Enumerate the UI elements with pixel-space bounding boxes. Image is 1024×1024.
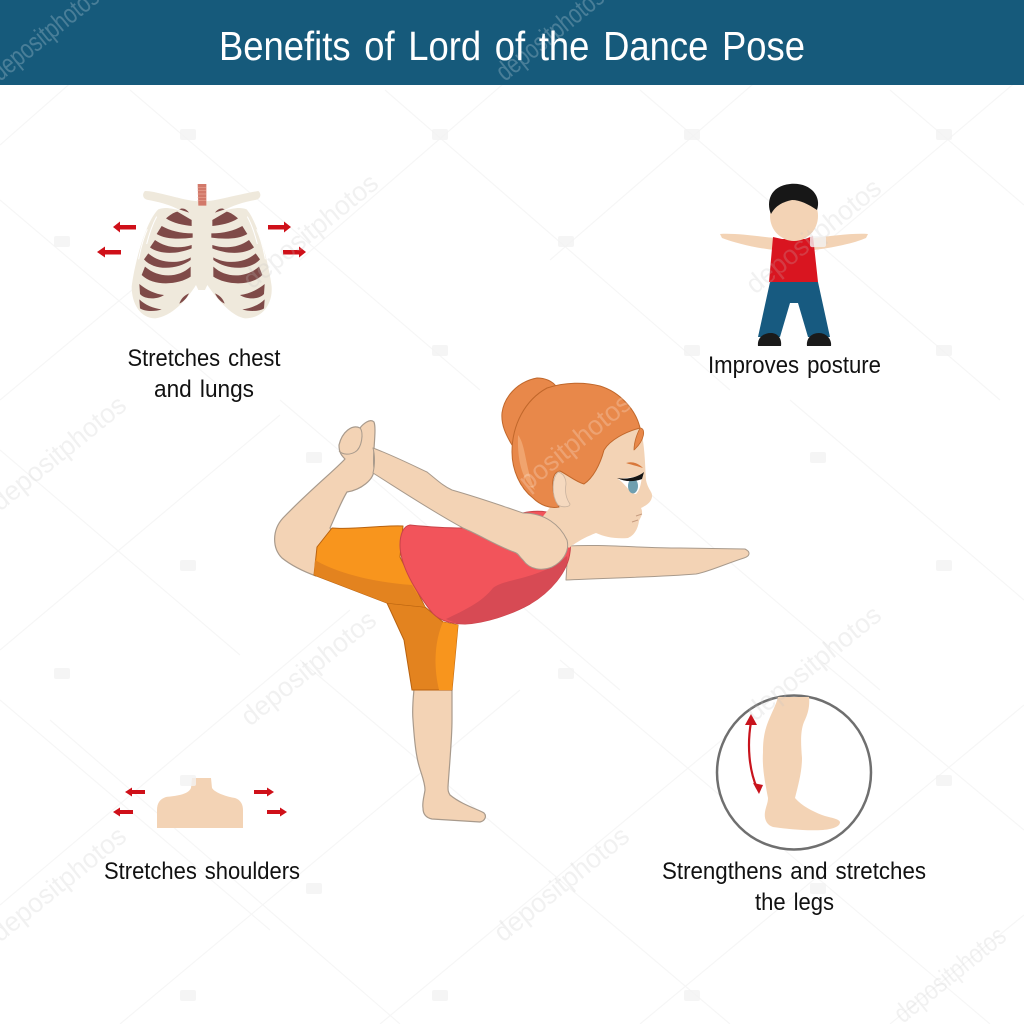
watermarks: depositphotos (237, 168, 384, 295)
watermarks: depositphotos (488, 821, 635, 948)
icon: leg in circle with arrow (717, 696, 871, 850)
hair (512, 383, 640, 508)
label: posture: Improves posture (708, 352, 881, 379)
central figure: woman in Lord of the Dance pose (275, 378, 749, 822)
bent leg (275, 421, 375, 576)
back arm (373, 448, 568, 569)
watermarks: depositphotos (740, 600, 887, 727)
header band (0, 0, 1024, 85)
watermarks: depositphotos (235, 605, 382, 732)
label: legs: the legs (755, 889, 834, 916)
lips (632, 514, 642, 522)
standing leg (413, 689, 485, 822)
top (400, 511, 570, 624)
ear (553, 472, 570, 507)
iris (628, 478, 638, 494)
bun (502, 378, 556, 445)
lower shorts (387, 603, 458, 690)
label: legs: Strengthens and stretches (662, 858, 926, 885)
front arm (566, 545, 749, 580)
icon: rib cage with arrows (97, 184, 306, 318)
label: chest and lungs (128, 345, 281, 403)
icon: boy with outstretched arms (720, 184, 868, 346)
label: chest and lungs: and lungs (154, 376, 254, 403)
label: shoulders: Stretches shoulders (104, 858, 300, 885)
icon: shoulders with arrows (113, 778, 287, 828)
neck (540, 500, 598, 548)
face (555, 425, 652, 545)
lash (617, 472, 644, 481)
watermarks: depositphotos (740, 173, 887, 300)
foot detail (339, 428, 362, 454)
thigh shorts (314, 526, 425, 607)
eye (618, 476, 642, 494)
head (502, 378, 652, 545)
curl (634, 428, 644, 450)
label: chest and lungs: Stretches chest (128, 345, 281, 372)
thigh shorts shade (314, 560, 425, 607)
watermarks: depositphotos (490, 388, 637, 515)
brow (626, 462, 643, 468)
top shade (446, 556, 567, 624)
label: legs (662, 858, 926, 916)
lower shorts highlight (436, 622, 458, 690)
hair highlight (518, 435, 535, 490)
title: Benefits of Lord of the Dance Pose (219, 23, 805, 69)
